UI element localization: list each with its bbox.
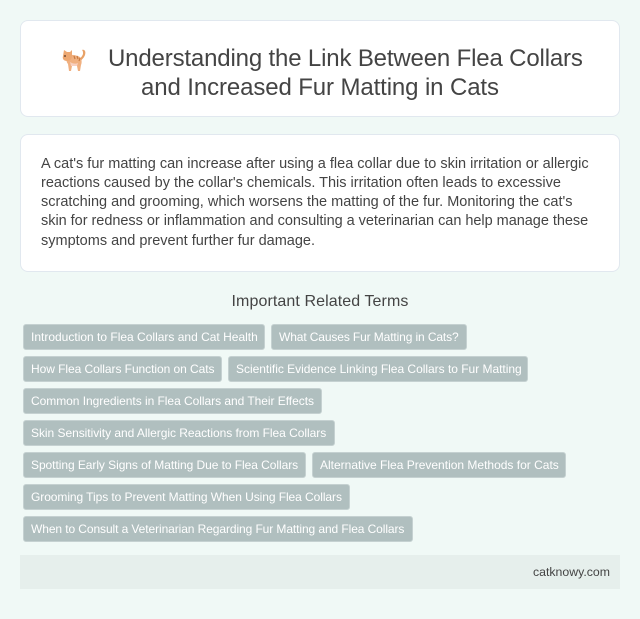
footer source text: catknowy.com [533, 565, 610, 579]
panel: title card [20, 20, 620, 117]
text block: symptoms and prevent further fur damage. [41, 233, 315, 249]
heading: related terms: Important Related Terms [232, 293, 408, 310]
tag [228, 356, 528, 382]
tag [312, 452, 566, 478]
tag: How Flea Collars Function on Cats [31, 362, 214, 376]
tag: Spotting Early Signs of Matting Due to Flea Collars [31, 458, 298, 472]
tag: Common Ingredients in Flea Collars and Their Effects [31, 394, 314, 408]
text block [41, 156, 589, 249]
panel: summary text [20, 134, 620, 272]
tag [23, 324, 265, 350]
tag: Skin Sensitivity and Allergic Reactions from Flea Collars [31, 426, 326, 440]
text block: A cat's fur matting can increase after using a flea collar due to skin irritation or allergic [41, 156, 589, 172]
tag: Scientific Evidence Linking Flea Collars to Fur Matting [236, 362, 522, 376]
tag [271, 324, 467, 350]
icon: cat [62, 50, 86, 71]
tag [23, 452, 306, 478]
heading: and Increased Fur Matting in Cats [141, 74, 499, 101]
tag [23, 356, 222, 382]
tag: Alternative Flea Prevention Methods for Cats [320, 458, 559, 472]
tag [23, 420, 335, 446]
tag: Grooming Tips to Prevent Matting When Using Flea Collars [31, 490, 342, 504]
tag [23, 516, 413, 542]
text block: reactions caused by the collar's chemicals. This irritation often leads to excessive [41, 175, 561, 191]
tag: Introduction to Flea Collars and Cat Health [31, 330, 258, 344]
heading: Understanding the Link Between Flea Collars [108, 45, 583, 72]
tag [23, 388, 322, 414]
text block: skin for redness or inflammation and consulting a veterinarian can help manage these [41, 213, 588, 229]
tag: When to Consult a Veterinarian Regarding Fur Matting and Flea Collars [31, 522, 404, 536]
tag: What Causes Fur Matting in Cats? [279, 330, 459, 344]
heading [108, 45, 583, 101]
panel: related term tags [23, 324, 566, 542]
text block: scratching and grooming, which worsens the matting of the fur. Monitoring the cat's [41, 194, 572, 210]
tag [23, 484, 350, 510]
footer [20, 555, 620, 589]
